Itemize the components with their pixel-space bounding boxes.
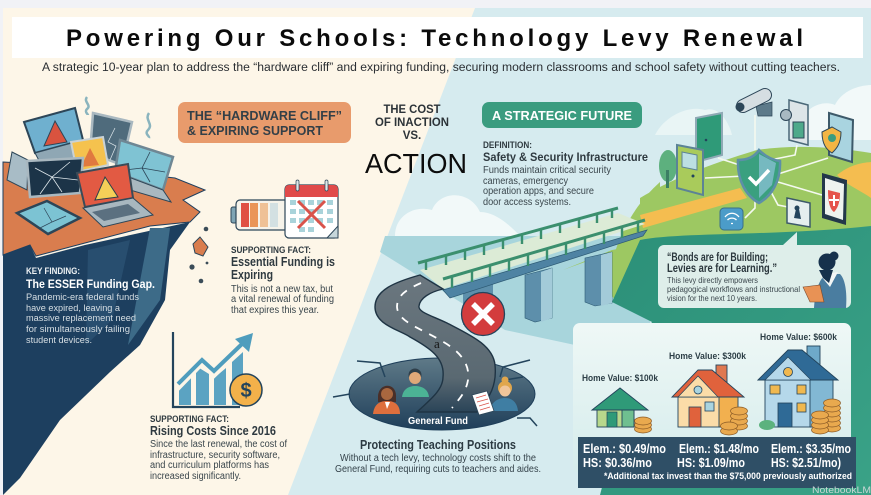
monthly cost table: Elem.: $0.49/mo xyxy=(583,442,666,456)
center heading: cost of inaction vs action: ACTION xyxy=(365,148,467,179)
key finding text: student devices. xyxy=(26,335,92,346)
title banner xyxy=(12,17,863,58)
monthly cost table: HS: $2.51/mo) xyxy=(771,456,841,470)
icon: access control panel xyxy=(780,100,808,145)
staff: woman in orange xyxy=(373,386,400,414)
supporting fact: funding expiring: SUPPORTING FACT: xyxy=(231,245,311,256)
home value labels: Home Value: $100k xyxy=(582,373,659,384)
callout: bonds and levies quote: This levy directly empowers xyxy=(667,275,758,285)
laptop: red warning xyxy=(77,164,153,227)
home value labels: Home Value: $300k xyxy=(669,351,747,362)
laptop: grey cracked xyxy=(90,113,132,165)
supporting fact: funding expiring: a vital renewal of funding xyxy=(231,294,334,305)
home value labels xyxy=(582,332,838,384)
callout: bonds and levies quote: pedagogical workflows and instructional xyxy=(667,284,800,294)
supporting fact: funding expiring: This is not a new tax, but xyxy=(231,284,333,295)
supporting fact: rising costs: Since the last renewal, the cost of xyxy=(150,439,287,450)
subtitle: A strategic 10-year plan to address the “hardware cliff” and expiring funding, securing modern classrooms and school safety without cutting teachers. xyxy=(42,62,840,74)
callout: bonds and levies quote: “Bonds are for Building; xyxy=(667,252,768,264)
key finding text xyxy=(26,266,155,346)
supporting fact: rising costs: Rising Costs Since 2016 xyxy=(150,424,276,438)
monthly cost table: Elem.: $1.48/mo xyxy=(679,442,759,456)
center heading: cost of inaction vs action xyxy=(365,104,467,179)
icon: low battery and expiring calendar xyxy=(231,180,338,238)
key finding text: KEY FINDING: xyxy=(26,266,80,276)
hole xyxy=(349,358,535,430)
definition text: Safety & Security Infrastructure xyxy=(483,150,648,164)
laptop: cracked blue xyxy=(115,140,173,202)
center heading: cost of inaction vs action: THE COST xyxy=(384,104,440,116)
supporting fact: funding expiring: Essential Funding is xyxy=(231,255,335,269)
heading pill: strategic future: A STRATEGIC FUTURE xyxy=(492,108,632,123)
supporting fact: rising costs: SUPPORTING FACT: xyxy=(150,414,229,425)
icon: security camera xyxy=(736,95,772,116)
key finding text: have expired, leaving a xyxy=(26,303,121,314)
icon: medium orange house xyxy=(672,365,748,435)
definition text: cameras, emergency xyxy=(483,176,568,187)
protecting teaching positions text: General Fund, requiring cuts to teachers and aides. xyxy=(335,464,541,475)
tablet: yellow warning xyxy=(71,137,108,172)
tablet: small cracked xyxy=(17,201,80,234)
supporting fact: funding expiring: Expiring xyxy=(231,268,273,282)
definition text: operation apps, and secure xyxy=(483,186,594,197)
definition text: Funds maintain critical security xyxy=(483,165,611,176)
monthly cost table: Elem.: $3.35/mo xyxy=(771,442,851,456)
back rail xyxy=(418,208,618,270)
callout: bonds and levies quote: Levies are for Learning.” xyxy=(667,263,777,275)
heading pill: hardware cliff xyxy=(178,102,351,143)
key finding text: Pandemic-era federal funds xyxy=(26,292,139,303)
illustration: sinkhole general fund with staff xyxy=(333,275,537,430)
definition text: door access systems. xyxy=(483,197,571,208)
chart icon: rising costs xyxy=(173,332,262,407)
illustration: crumbling cliff with broken laptops xyxy=(3,97,208,495)
supporting fact: rising costs: and curriculum platforms has xyxy=(150,460,269,471)
protecting teaching positions text xyxy=(335,438,541,475)
icon: back door xyxy=(696,113,722,162)
definition text: DEFINITION: xyxy=(483,140,532,150)
icon: keyhole lock xyxy=(787,198,810,227)
key finding text: massive replacement need xyxy=(26,313,136,324)
supporting fact: funding expiring: that expires this year. xyxy=(231,305,319,316)
laptop: blue warning xyxy=(24,108,92,172)
laptop: grey left xyxy=(7,152,28,190)
monthly cost table: HS: $1.09/mo xyxy=(677,456,745,470)
staff: man in teal xyxy=(402,368,429,397)
icon: red x badge xyxy=(462,292,504,336)
supporting fact: rising costs xyxy=(150,414,287,482)
icon: large blue house xyxy=(758,346,840,434)
deck xyxy=(420,213,645,289)
tree xyxy=(659,150,677,188)
pillars xyxy=(463,280,493,325)
cliff top xyxy=(3,162,205,256)
stray letter on road: a xyxy=(434,336,440,351)
road xyxy=(375,275,495,412)
cliff body xyxy=(3,222,190,495)
panel: home value tax cost xyxy=(573,323,856,488)
protecting teaching positions text: Without a tech levy, technology costs shift to the xyxy=(340,453,536,464)
illustration: safety network xyxy=(659,95,853,230)
title banner: Powering Our Schools: Technology Levy Renewal xyxy=(66,25,803,52)
chart icon: rising costs: $ xyxy=(240,380,252,402)
icon: small green house xyxy=(592,388,652,433)
icon: tablet with shield xyxy=(822,113,853,162)
callout: bonds and levies quote: vision for the next 10 years. xyxy=(667,293,757,303)
connector arrows xyxy=(705,115,828,218)
supporting fact: rising costs: increased significantly. xyxy=(150,471,241,482)
heading pill: hardware cliff: & EXPIRING SUPPORT xyxy=(187,123,323,138)
protecting teaching positions text: Protecting Teaching Positions xyxy=(360,438,516,452)
icon: phone with medical cross xyxy=(822,173,847,225)
smoke squiggles xyxy=(86,97,150,138)
figure: teacher with tablet xyxy=(803,252,846,308)
supporting fact: rising costs: infrastructure, security software, xyxy=(150,450,280,461)
center heading: cost of inaction vs action: OF INACTION xyxy=(375,117,449,129)
key finding text: for simultaneously failing xyxy=(26,324,130,335)
illustration: bridge xyxy=(418,208,647,325)
watermark: NotebookLM xyxy=(812,485,871,495)
supporting fact: funding expiring xyxy=(231,245,335,316)
staff: woman with clipboard xyxy=(472,376,518,415)
front rail xyxy=(443,220,645,288)
home value labels: Home Value: $600k xyxy=(760,332,838,343)
key finding text: The ESSER Funding Gap. xyxy=(26,279,155,291)
center heading: cost of inaction vs action: VS. xyxy=(403,130,421,142)
icon: central shield with check xyxy=(738,150,780,203)
falling rocks xyxy=(189,227,208,283)
monthly cost table: *Additional tax invest than the $75,000 previously authorized xyxy=(604,471,852,481)
heading pill: strategic future xyxy=(482,102,642,128)
tablet: dark shattered xyxy=(27,158,83,197)
monthly cost table xyxy=(578,437,856,488)
callout: bonds and levies quote xyxy=(658,232,851,308)
definition text xyxy=(483,140,648,208)
hole label: General Fund xyxy=(408,415,468,427)
icon: front door xyxy=(677,145,703,195)
monthly cost table: HS: $0.36/mo xyxy=(583,456,652,470)
heading pill: hardware cliff: THE “HARDWARE CLIFF” xyxy=(187,108,342,123)
icon: wifi xyxy=(720,208,743,230)
